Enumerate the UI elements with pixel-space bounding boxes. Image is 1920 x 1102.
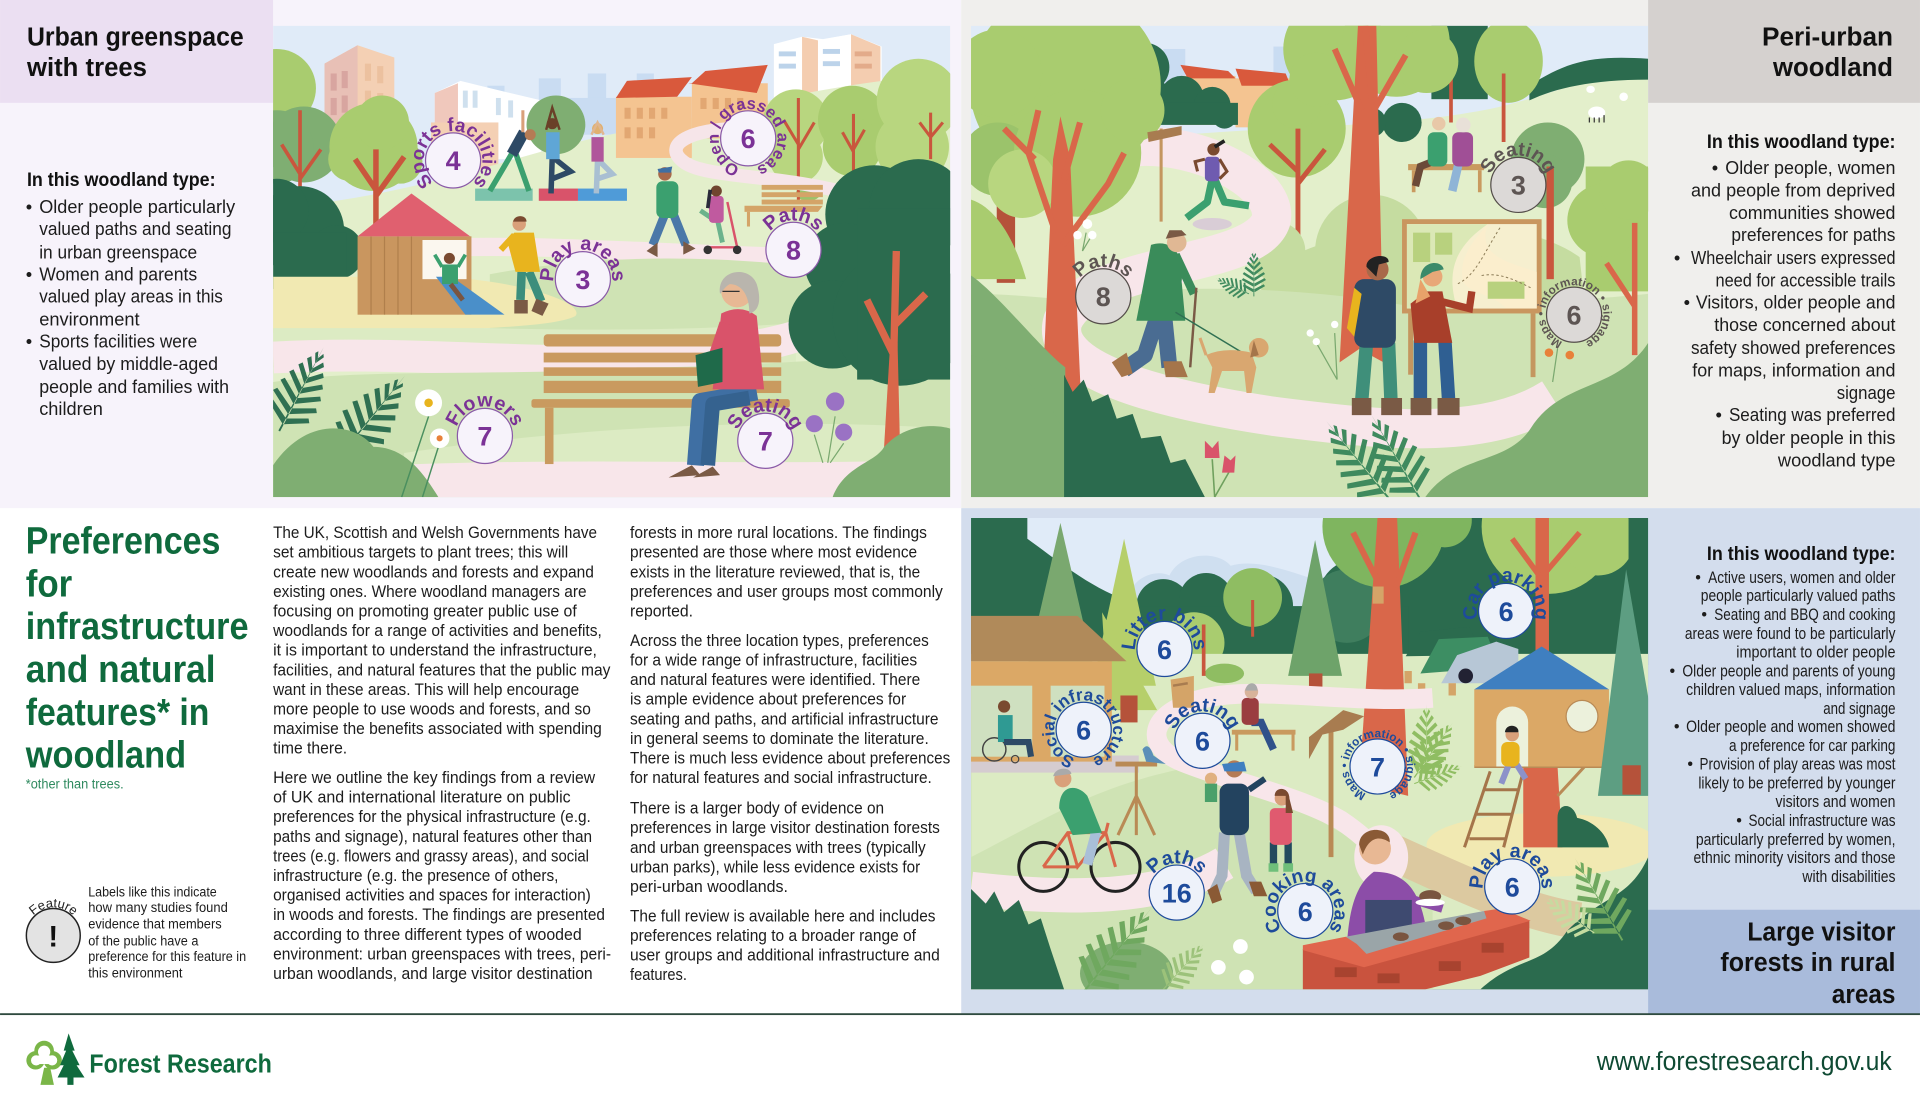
right side trees	[1511, 122, 1658, 355]
text block: introduction column 2: user groups and additional infrastructure and	[630, 946, 940, 965]
badge: open grassed areas 6: 6	[741, 124, 756, 154]
text block: introduction column 2: preferences and user groups most commonly	[630, 582, 943, 601]
heading: peri-urban woodland: woodland	[1772, 54, 1893, 82]
map board	[1402, 219, 1542, 377]
badge: play areas 6: Play areas	[1469, 846, 1552, 888]
title: woodland	[25, 735, 186, 777]
text block: peri-urban findings: communities showed	[1729, 202, 1895, 223]
text block: introduction column 1: maximise the benefits associated with spending	[273, 719, 602, 738]
distant skyline	[487, 73, 654, 140]
green behind lower path	[273, 323, 796, 367]
bench couple	[1408, 117, 1484, 192]
signpost	[1309, 710, 1364, 857]
badge: paths 16: Paths	[1146, 850, 1206, 874]
text block: urban greenspace findings: •	[26, 331, 32, 352]
bottom-left dark bush	[971, 889, 1064, 989]
text block: urban greenspace findings: in urban greenspace	[39, 241, 197, 262]
white flowers	[1211, 939, 1254, 984]
text block: urban greenspace findings: people and families with	[39, 376, 229, 397]
badge: open grassed areas 6: Open / grassed areas	[710, 100, 786, 176]
family walking	[1205, 760, 1293, 904]
text block: introduction column 2: There is much less evidence about preferences	[630, 748, 950, 767]
panel: peri-urban text	[1648, 0, 1920, 471]
treehouse with ladder and child	[1464, 647, 1609, 847]
legend text: Labels like this indicate	[88, 883, 217, 899]
text block: introduction column 1: urban woodlands, and large visitor destination	[273, 964, 593, 983]
playhouse with slide and child	[358, 193, 505, 315]
badge: maps information signage 6: Maps • information • signage	[1537, 278, 1612, 349]
heading: large visitor forests in rural areas: areas	[1832, 981, 1895, 1009]
text block: large visitor forests findings: Social infrastructure was	[1749, 812, 1895, 830]
path loop	[676, 129, 857, 196]
heading: urban greenspace with trees	[0, 0, 273, 103]
title: infrastructure	[26, 606, 249, 648]
badge: car parking 6: Car parking	[1463, 571, 1546, 619]
text block: peri-urban findings: woodland type	[1777, 450, 1895, 471]
small trunk near litter	[1202, 624, 1205, 676]
text block: peri-urban findings: •	[1712, 157, 1718, 178]
text block: peri-urban findings: Visitors, older people and	[1696, 292, 1895, 313]
text block: introduction column 2: and natural features were identified. There	[630, 670, 920, 689]
walking adult and child on scooter	[647, 167, 741, 257]
skyline	[1163, 46, 1290, 84]
badge: paths 8	[762, 207, 822, 278]
text block: peri-urban findings: preferences for paths	[1731, 224, 1895, 245]
legend text: of the public have a	[88, 932, 199, 948]
legend text: this environment	[88, 965, 183, 981]
logo: forest research	[26, 1033, 272, 1085]
text block: peri-urban findings: Wheelchair users expressed	[1691, 247, 1895, 268]
visitor cabin	[971, 616, 1127, 762]
badge: paths 8: 8	[786, 236, 801, 266]
houses with red roofs	[616, 65, 768, 158]
badge: paths 8: 8	[1096, 282, 1111, 312]
badge: paths 8: Paths	[762, 207, 822, 230]
text block: large visitor forests findings: •	[1670, 663, 1676, 681]
houses	[1180, 65, 1291, 127]
text block: introduction column 1: create new woodlands and forests and expand	[273, 562, 594, 581]
badge: seating 7: Seating	[728, 398, 802, 430]
text block: large visitor forests findings: with disabilities	[1802, 868, 1895, 886]
text block: large visitor forests findings: •	[1674, 718, 1680, 736]
badge: seating 3: Seating	[1480, 142, 1554, 174]
text block: introduction column 2: There is a larger body of evidence on	[630, 799, 884, 818]
badge: flowers 7	[445, 396, 521, 464]
text block: introduction column 1: of UK and international literature on public	[273, 788, 571, 807]
heading: large visitor forests in rural areas	[1648, 910, 1920, 1014]
badge: litter bins 6: 6	[1157, 635, 1172, 665]
lower path	[273, 316, 845, 362]
badge: seating 6	[1165, 698, 1238, 769]
text block: introduction column 1: in woods and forests. The findings are presented	[273, 905, 605, 924]
badge: seating 3	[1480, 142, 1554, 213]
heading: urban greenspace with trees: with trees	[26, 54, 147, 82]
heading: urban greenspace with trees: Urban greenspace	[27, 23, 244, 51]
mid bushes	[1250, 195, 1583, 305]
badge: flowers 7: 7	[477, 422, 492, 452]
footer rule	[0, 1013, 1920, 1015]
text block: introduction column 1: preferences for the physical infrastructure (e.g.	[273, 807, 591, 826]
text block: peri-urban findings: •	[1715, 404, 1722, 425]
badge: seating 3: 3	[1511, 171, 1526, 201]
text block: large visitor forests findings: In this woodland type:	[1707, 543, 1895, 565]
big trunks	[1353, 518, 1580, 796]
icon: example feature badge	[26, 899, 81, 964]
text block: peri-urban findings: signage	[1837, 382, 1895, 403]
legend text	[88, 883, 246, 981]
text block: large visitor forests findings: •	[1687, 756, 1693, 774]
illustration: peri-urban woodland	[971, 26, 1648, 498]
upper path	[453, 247, 857, 260]
jagged dark bush	[1064, 375, 1205, 497]
text block: introduction column 2: seating and paths, and artificial infrastructure	[630, 709, 939, 728]
heading: large visitor forests in rural areas: forests in rural	[1720, 949, 1895, 977]
text block: large visitor forests findings: •	[1736, 812, 1742, 830]
text block: introduction column 2: for natural features and social infrastructure.	[630, 768, 932, 787]
badge: seating 6: 6	[1195, 727, 1210, 757]
title: and natural	[26, 649, 216, 691]
text block: introduction column 1: facilities, and natural features that the public may	[273, 660, 611, 679]
text block: urban greenspace findings: Women and parents	[39, 263, 197, 284]
text block: large visitor forests findings	[1670, 543, 1896, 886]
text block: introduction column 1: it is important to understand the infrastructure,	[273, 641, 597, 660]
text block: peri-urban findings: Older people, women	[1725, 157, 1895, 178]
badge: social infrastructure 6: 6	[1076, 716, 1091, 746]
text block: urban greenspace findings: valued paths and seating	[39, 218, 231, 239]
text block: introduction column 1: paths and signage), natural features other than	[273, 827, 592, 846]
badge: litter bins 6	[1121, 608, 1204, 678]
legend: feature label explanation	[26, 883, 246, 981]
title: Preferences	[26, 520, 220, 562]
text block: urban greenspace findings: valued by middle-aged	[39, 353, 218, 374]
cyclist	[1019, 769, 1140, 891]
panel: urban greenspace text	[0, 0, 273, 419]
text block: peri-urban findings: In this woodland type:	[1707, 131, 1895, 153]
badge: sports facilities 4: Sports facilities	[414, 117, 496, 188]
grass	[971, 289, 1648, 497]
badge: maps information signage 6: 6	[1567, 300, 1582, 330]
text block: peri-urban findings	[1674, 131, 1895, 471]
wordmark: Forest Research	[89, 1051, 272, 1079]
seated woman and bench	[1232, 683, 1295, 751]
runner	[1187, 141, 1249, 230]
badge: litter bins 6: Litter bins	[1121, 608, 1204, 650]
heading: peri-urban woodland: Peri-urban	[1762, 23, 1893, 51]
text block: peri-urban findings: by older people in this	[1722, 427, 1895, 448]
text block: introduction column 2: urban parks), while less evidence exists for	[630, 857, 921, 876]
main bench	[531, 334, 790, 464]
pink path	[1157, 694, 1433, 869]
text block: peri-urban findings: and people from deprived	[1691, 180, 1895, 201]
text block: introduction column 2: preferences in large visitor destination forests	[630, 818, 940, 837]
text block: introduction column 1: environment: urban greenspaces with trees, peri-	[273, 944, 611, 963]
badge: seating 6: Seating	[1165, 698, 1238, 730]
text block: large visitor forests findings: visitors and women	[1775, 793, 1895, 811]
text block: peri-urban findings: safety showed preferences	[1691, 337, 1895, 358]
title	[25, 520, 249, 777]
left trees and bushes	[273, 49, 586, 289]
text block: urban greenspace findings: Sports facilities were	[39, 331, 197, 352]
text block: introduction column 2: reported.	[630, 602, 693, 621]
badge: play areas 6	[1469, 846, 1552, 915]
legend text: preference for this feature in	[88, 948, 246, 964]
text block: introduction column 1: according to three different types of wooded	[273, 925, 582, 944]
text block: introduction column 2: features.	[630, 965, 687, 984]
badge: play areas 3: 3	[575, 265, 590, 295]
small red flowers	[1545, 348, 1574, 382]
litter bin	[1171, 676, 1194, 708]
text block: urban greenspace findings: In this woodland type:	[27, 169, 216, 191]
sheep	[1586, 86, 1628, 122]
text block: introduction column 2: forests in more rural locations. The findings	[630, 523, 927, 542]
white flowers	[1073, 219, 1338, 380]
sand play area	[273, 276, 577, 333]
badge: maps information signage 7: 7	[1370, 752, 1385, 782]
text block: urban greenspace findings: Older people particularly	[39, 196, 236, 217]
text block: urban greenspace findings: •	[26, 196, 32, 217]
text block: introduction column 2: presented are those where most evidence	[630, 543, 917, 562]
visitors at map	[1347, 256, 1472, 415]
badge: play areas 3	[540, 239, 623, 308]
text block: introduction column 2	[630, 523, 950, 984]
cars	[1406, 627, 1518, 683]
fronds at right	[1535, 845, 1644, 953]
man walking with stick and dog	[1112, 230, 1269, 393]
icon: oak and pine	[26, 1033, 85, 1085]
text block: large visitor forests findings: •	[1701, 606, 1707, 624]
text block: urban greenspace findings	[26, 169, 236, 419]
text block: introduction column 1: focusing on promoting greater public use of	[273, 602, 577, 621]
winding path	[1062, 146, 1553, 429]
title: for	[26, 563, 72, 605]
heading: large visitor forests in rural areas: Large visitor	[1747, 918, 1895, 946]
ground	[971, 654, 1648, 989]
foreground grass	[273, 361, 950, 466]
badge: cooking areas 6: 6	[1298, 897, 1313, 927]
wheelchair user	[983, 700, 1031, 763]
plants: ferns and bush bottom left	[273, 348, 438, 498]
text block: introduction column 2: for a wide range of infrastructure, facilities	[630, 650, 917, 669]
apartment buildings	[325, 34, 882, 171]
text block: peri-urban findings: •	[1674, 247, 1680, 268]
ground hill	[971, 80, 1648, 298]
dark bushes at the back	[1112, 26, 1648, 142]
text block: peri-urban findings: •	[1684, 292, 1690, 313]
pale bush and fern bottom	[1062, 890, 1216, 1009]
badge: cooking areas 6: Cooking areas	[1266, 872, 1345, 932]
badge: paths 8: Paths	[1072, 254, 1132, 277]
badge: play areas 3: Play areas	[540, 239, 623, 281]
icon: example feature badge: !	[48, 920, 58, 953]
fern	[1327, 416, 1430, 498]
title: features* in	[26, 692, 209, 734]
panel: large visitor forests text	[1648, 543, 1920, 1014]
illustration: urban greenspace	[238, 26, 967, 497]
text block: introduction column 1: woodlands for a range of activities and benefits,	[272, 621, 602, 640]
central tree	[1283, 0, 1458, 362]
text block: introduction column 2: preferences relating to a broader range of	[630, 926, 916, 945]
text block: introduction column 2: and urban greenspaces with trees (typically	[630, 838, 926, 857]
text block: peri-urban findings: for maps, information and	[1692, 360, 1895, 381]
text block: introduction column 2: exists in the literature reviewed, that is, the	[630, 562, 920, 581]
back crowns	[1163, 459, 1648, 673]
bush bottom right	[833, 426, 950, 497]
flowers white and purple	[402, 389, 852, 497]
heading: peri-urban woodland	[1648, 0, 1920, 103]
bottom path	[389, 478, 950, 484]
badge: maps information signage 7: Maps • information • signage	[1340, 730, 1416, 800]
text block: introduction column 1: more people to use woods and forests, and so	[273, 699, 591, 718]
badge: seating 7: 7	[758, 427, 773, 457]
text block: large visitor forests findings: particularly preferred by women,	[1696, 831, 1895, 849]
text block: introduction column 1: Here we outline the key findings from a review	[273, 768, 596, 787]
text block: urban greenspace findings: valued play areas in this	[39, 285, 223, 306]
text block: introduction column 2: in general seems to dominate the literature.	[630, 729, 929, 748]
legend text: how many studies found	[88, 899, 228, 915]
text block: urban greenspace findings: environment	[39, 309, 140, 330]
badge: car parking 6: 6	[1499, 597, 1514, 627]
dark tree row	[1127, 558, 1408, 655]
pine trees	[1029, 523, 1342, 722]
badge: paths 8	[1072, 254, 1132, 324]
background hill	[273, 73, 950, 497]
text block: urban greenspace findings: children	[39, 398, 103, 419]
man at barbecue	[1347, 825, 1445, 949]
badge: social infrastructure 6: Social infrastructure	[1042, 690, 1123, 768]
woman reading on bench	[669, 272, 764, 478]
text block: peri-urban findings: need for accessible trails	[1715, 270, 1895, 291]
badge: flowers 7: Flowers	[445, 396, 521, 426]
left bushes	[971, 200, 1066, 498]
text block: introduction column 1: organised activities and spaces for interaction)	[273, 886, 591, 905]
badge: seating 7	[728, 398, 802, 469]
text block: large visitor forests findings: •	[1695, 569, 1701, 587]
text block: introduction column 1: want in these areas. This will help encourage	[272, 680, 579, 699]
text block: introduction column 1: The UK, Scottish and Welsh Governments have	[273, 523, 597, 542]
brick barbecue	[1303, 909, 1531, 989]
text block: introduction column 1: infrastructure (e.g. the presence of others,	[273, 866, 558, 885]
icon: example feature badge: Feature	[28, 899, 76, 915]
small bench	[744, 185, 823, 227]
text block: introduction column 1: existing ones. Where woodland managers are	[273, 582, 587, 601]
text block: peri-urban findings: those concerned about	[1714, 314, 1895, 335]
bird table	[1116, 746, 1166, 835]
dark bush beside tree	[1558, 806, 1609, 847]
sky and cloud	[1027, 518, 1347, 612]
sand	[1427, 813, 1659, 877]
text block: large visitor forests findings: Older people and women showed	[1686, 718, 1895, 736]
parking posts	[1404, 671, 1456, 695]
tulips	[1205, 441, 1236, 497]
text block: introduction column 2: The full review is available here and includes	[630, 906, 936, 925]
text block: introduction column 2: is ample evidence about preferences for	[630, 690, 907, 709]
badge: paths 16: 16	[1162, 878, 1192, 908]
dark tree right	[789, 159, 967, 447]
text block: introduction column 2: Across the three location types, preferences	[630, 631, 929, 650]
text block: peri-urban findings: Seating was preferred	[1729, 404, 1895, 425]
right dark bush	[1480, 857, 1648, 989]
mid grass	[490, 259, 833, 331]
text block: large visitor forests findings: and signage	[1823, 700, 1895, 718]
text block: urban greenspace findings: •	[26, 263, 32, 284]
text block: introduction column 2: peri-urban woodlands.	[630, 877, 788, 896]
ferny bush by tree	[1400, 704, 1467, 796]
illustration: large visitor forest	[971, 459, 1665, 1009]
yoga group	[475, 108, 627, 201]
badge: play areas 6: 6	[1505, 872, 1520, 902]
text block: introduction column 1: set ambitious targets to plant trees; this will	[273, 543, 568, 562]
text block: introduction column 1: time there.	[273, 739, 347, 758]
right pine	[1598, 569, 1665, 796]
man in yellow jumper	[501, 216, 549, 316]
badge: sports facilities 4: 4	[446, 146, 461, 176]
badge: car parking 6	[1463, 571, 1546, 640]
left tree	[971, 26, 1164, 392]
text block: large visitor forests findings: important to older people	[1736, 644, 1895, 662]
badge: paths 16	[1146, 850, 1206, 921]
legend text: evidence that members	[88, 916, 222, 932]
small plant	[1212, 250, 1266, 303]
signpost	[1147, 126, 1182, 222]
far crowns	[1248, 20, 1543, 236]
footnote: *other than trees.	[26, 777, 124, 792]
text block: introduction column 1: trees (e.g. flowers and grassy areas), and social	[273, 846, 589, 865]
right small trees	[763, 59, 960, 202]
text block: introduction column 1	[272, 523, 611, 983]
small bush	[1205, 664, 1244, 683]
website address: www.forestresearch.gov.uk	[1596, 1048, 1892, 1076]
bottom right bush	[1425, 343, 1648, 497]
